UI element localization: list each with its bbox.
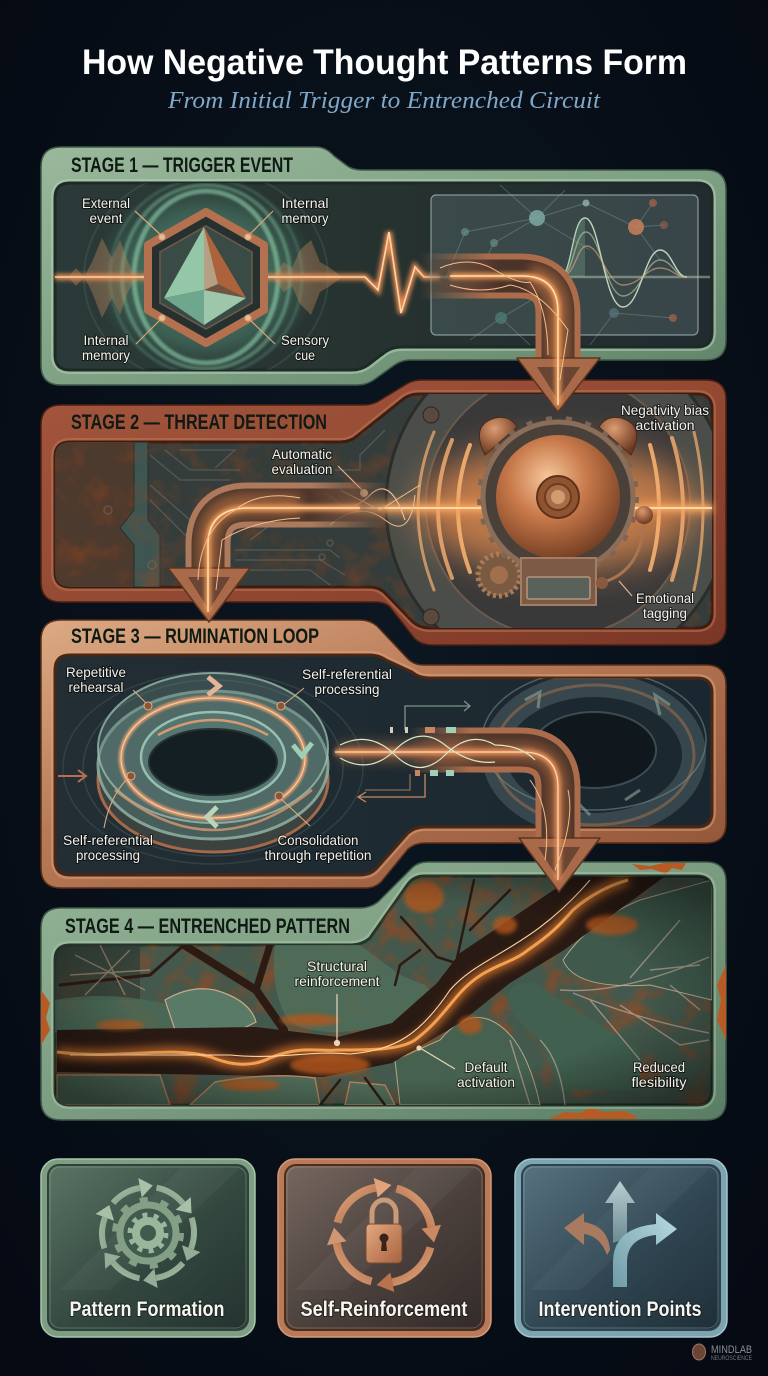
labels: stage 3: Self-referential	[63, 832, 153, 848]
labels: stage 3: processing	[314, 681, 380, 697]
logo tagline: NEUROSCIENCE	[711, 1356, 752, 1362]
faded loop ring at right	[482, 670, 706, 825]
title: How Negative Thought Patterns Form	[82, 43, 687, 82]
small circuit arrows	[358, 701, 470, 802]
inner screen: stage 2	[55, 394, 712, 628]
inner screen: stage 3	[55, 655, 712, 875]
callout lines: stage 1	[135, 211, 275, 344]
frame: stage 2	[41, 380, 726, 645]
card label: intervention points: Intervention Points	[538, 1298, 702, 1321]
callout lines: stage 2	[338, 466, 632, 596]
labels: stage 3: processing	[76, 847, 140, 863]
icon: alarm bell	[478, 417, 653, 605]
heading: stage 1: STAGE 1 — TRIGGER EVENT	[71, 154, 293, 177]
frame: stage 4	[41, 862, 726, 1120]
labels: stage 3: rehearsal	[68, 679, 124, 695]
logo wordmark: MINDLAB	[711, 1344, 752, 1356]
signal beam	[215, 485, 712, 526]
labels: stage 2: tagging	[643, 605, 687, 621]
panel: stage 1 trigger event	[41, 147, 726, 385]
labels: stage 4	[294, 958, 686, 1090]
icon: rumination torus	[58, 672, 363, 864]
labels: stage 2: Negativity bias	[621, 402, 709, 418]
glow rings around hexagon	[83, 183, 328, 370]
panel: stage 4 entrenched pattern	[41, 862, 726, 1120]
labels: stage 4: flesibility	[632, 1074, 686, 1090]
heading: stage 2: STAGE 2 — THREAT DETECTION	[71, 411, 327, 434]
machinery background	[55, 394, 712, 628]
frame: stage 1	[41, 147, 726, 385]
subtitle: From Initial Trigger to Entrenched Circuit	[167, 88, 601, 114]
labels: stage 2: evaluation	[272, 461, 332, 477]
labels: stage 1: Sensory	[281, 332, 329, 348]
card: intervention points	[515, 1159, 727, 1337]
card label: self-reinforcement: Self-Reinforcement	[300, 1298, 468, 1321]
frame: stage 3	[41, 620, 726, 888]
card label: pattern formation: Pattern Formation	[70, 1298, 224, 1321]
card body: pattern formation	[41, 1159, 255, 1337]
icon: hexagon crystal	[148, 212, 264, 343]
connector bands: stage 3 arrow edge markers	[390, 727, 456, 776]
labels: stage 4: Default	[464, 1059, 508, 1075]
labels: stage 4: reinforcement	[294, 973, 380, 989]
rust patches on frame	[41, 863, 726, 1119]
labels: stage 1	[82, 195, 329, 363]
card body: self-reinforcement	[278, 1159, 491, 1337]
labels: stage 3: through repetition	[264, 847, 372, 863]
waveform: trigger pulse	[55, 232, 440, 318]
labels: stage 4: activation	[457, 1074, 515, 1090]
labels: stage 2: Automatic	[272, 446, 332, 462]
labels: stage 4: Structural	[307, 958, 367, 974]
callout lines: stage 4	[334, 994, 455, 1069]
labels: stage 1: event	[90, 210, 123, 226]
labels: stage 4: Reduced	[633, 1059, 685, 1075]
arrow: stage 1 to stage 2	[420, 262, 600, 412]
labels: stage 3: Consolidation	[278, 832, 358, 848]
icon: gear with six circular arrows	[83, 1175, 213, 1291]
labels: stage 3	[63, 664, 392, 863]
clock plate	[384, 394, 712, 628]
icon: padlock with circular arrows	[327, 1178, 441, 1292]
card body: intervention points	[515, 1159, 727, 1337]
heading: stage 3: STAGE 3 — RUMINATION LOOP	[71, 625, 319, 648]
glass panel: neural network and wave	[431, 185, 710, 345]
heading: stage 4: STAGE 4 — ENTRENCHED PATTERN	[65, 915, 350, 938]
labels: stage 1: External	[82, 195, 130, 211]
labels: stage 2: Emotional	[636, 590, 694, 606]
callout lines: stage 3	[104, 688, 310, 828]
labels: stage 1: Internal	[84, 332, 128, 348]
labels: stage 1: memory	[82, 347, 130, 363]
logo: mindlab neuroscience	[692, 1344, 752, 1362]
arrow: stage 2 to stage 3	[168, 496, 395, 622]
labels: stage 3: Self-referential	[302, 666, 392, 682]
arrow: stage 3 to stage 4	[335, 736, 600, 892]
labels: stage 3: Repetitive	[66, 664, 126, 680]
panel: stage 2 threat detection	[40, 379, 727, 646]
labels: stage 1: cue	[295, 347, 315, 363]
card: self-reinforcement	[278, 1159, 491, 1337]
labels: stage 2: activation	[636, 417, 694, 433]
cracks and glowing strand	[55, 876, 715, 1106]
icon: brain	[692, 1344, 706, 1360]
labels: stage 1: memory	[282, 210, 328, 226]
cracked surface	[55, 876, 712, 1105]
sound wave arcs	[418, 432, 703, 590]
icon: branching arrows	[564, 1181, 677, 1287]
card: pattern formation	[41, 1159, 255, 1337]
labels: stage 1: Internal	[282, 195, 328, 211]
labels: stage 2	[272, 402, 709, 621]
panel: stage 3 rumination loop	[41, 620, 726, 888]
inner screen: stage 1	[55, 183, 712, 370]
